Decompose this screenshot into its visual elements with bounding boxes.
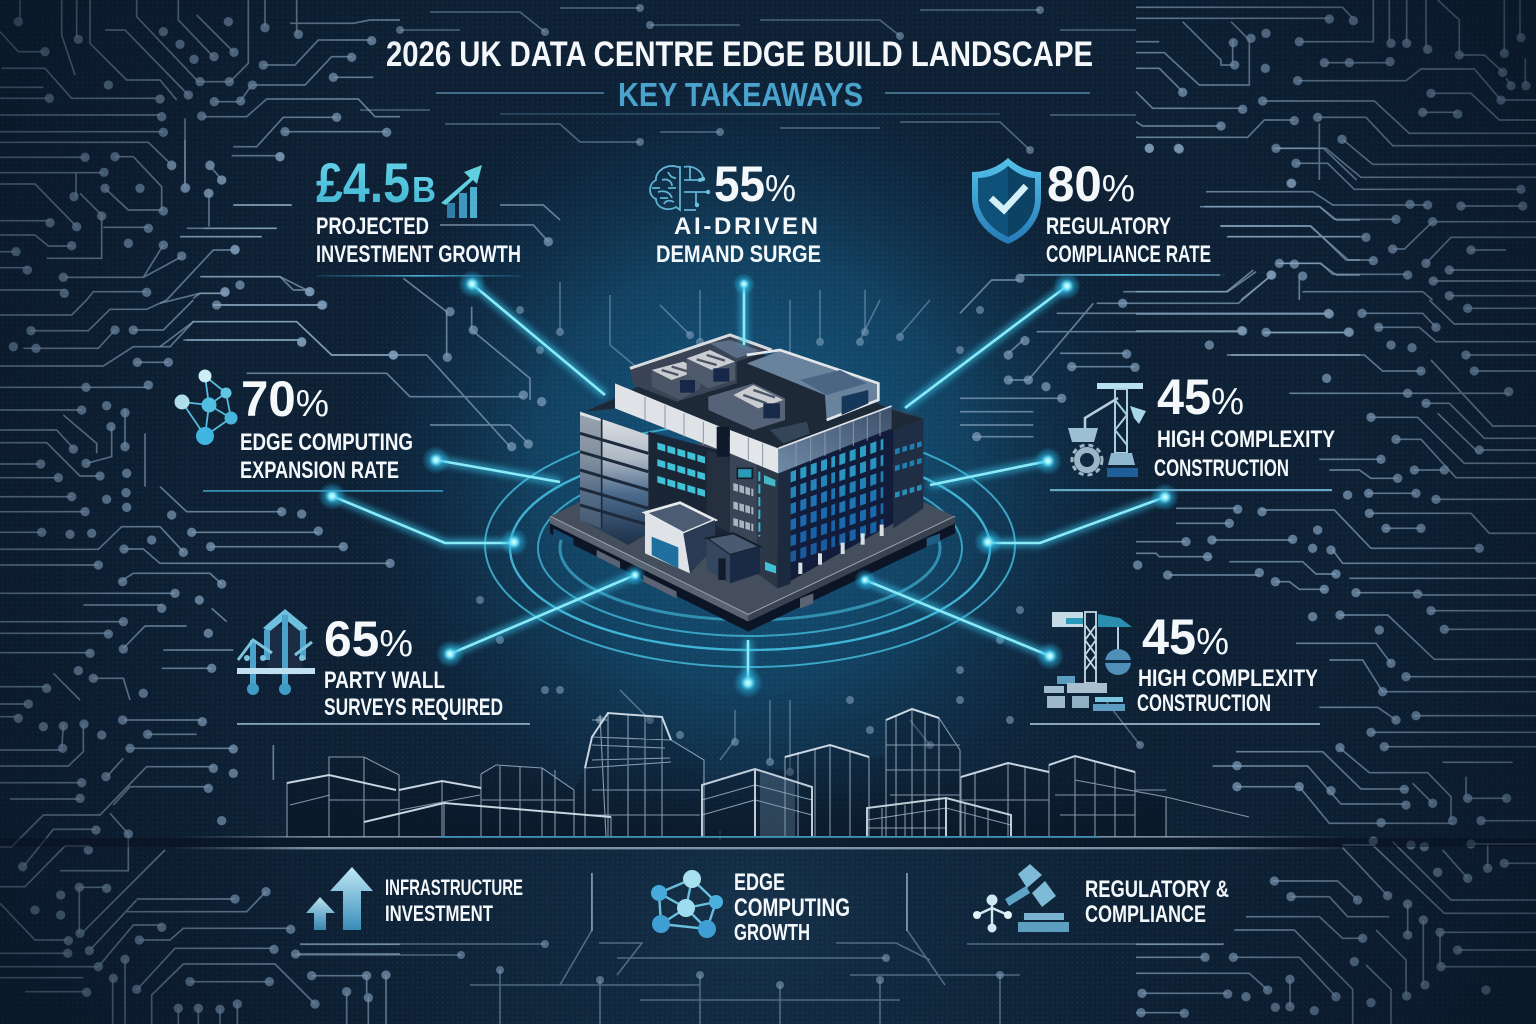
label: DEMAND SURGE bbox=[656, 241, 821, 268]
skyline illustration bbox=[287, 709, 1249, 837]
label bbox=[1154, 426, 1335, 482]
metric: edge computing expansion bbox=[174, 370, 413, 484]
label: CONSTRUCTION bbox=[1137, 690, 1271, 717]
label: COMPUTING bbox=[734, 894, 850, 922]
metric: high complexity construction lower bbox=[1044, 609, 1318, 717]
footer: edge computing growth bbox=[651, 869, 850, 945]
label bbox=[240, 429, 413, 484]
label: INFRASTRUCTURE bbox=[385, 875, 523, 900]
label bbox=[324, 667, 503, 721]
building platform bbox=[550, 420, 955, 632]
divider: construction lower bbox=[1030, 723, 1320, 725]
label: AI-DRIVEN bbox=[674, 213, 818, 240]
connector lines bbox=[318, 270, 1179, 698]
ground lines bbox=[0, 836, 1536, 849]
divider: edge bbox=[203, 490, 443, 492]
icon: crane with gear bbox=[1068, 383, 1146, 477]
label bbox=[1085, 876, 1229, 928]
rooftop duct block bbox=[747, 350, 878, 420]
label: COMPLIANCE RATE bbox=[1046, 241, 1211, 268]
metric: investment growth bbox=[316, 151, 521, 268]
icon: rising bar chart bbox=[441, 165, 482, 218]
label bbox=[656, 213, 821, 268]
building right face windows bbox=[777, 410, 893, 588]
label: CONSTRUCTION bbox=[1154, 455, 1289, 482]
divider: construction upper bbox=[1050, 489, 1332, 491]
rooftop plant enclosure bbox=[630, 335, 772, 402]
white entrance block bbox=[645, 503, 715, 573]
icon: shield with check bbox=[972, 158, 1041, 244]
value: £4.5B: B bbox=[412, 169, 436, 210]
value: £4.5B: £4.5 bbox=[316, 151, 410, 214]
label: GROWTH bbox=[734, 919, 810, 945]
icon: party wall structure bbox=[237, 609, 315, 695]
icon: network bbox=[651, 870, 723, 938]
label: EDGE bbox=[734, 869, 785, 896]
title: 2026 UK DATA CENTRE EDGE BUILD LANDSCAPE bbox=[386, 35, 1093, 74]
metric: AI-driven demand bbox=[650, 156, 821, 268]
icon: circuit brain bbox=[650, 166, 710, 210]
metric: party wall surveys bbox=[237, 609, 503, 721]
subtitle with flanking lines: KEY TAKEAWAYS bbox=[618, 76, 863, 113]
divider: compliance bbox=[1020, 274, 1225, 276]
roof bbox=[585, 340, 923, 473]
value: 55%: 55% bbox=[714, 156, 796, 212]
value: 65%: 65% bbox=[324, 611, 413, 667]
rooftop cooling unit bbox=[708, 383, 810, 443]
value: 45%: 45% bbox=[1157, 369, 1244, 425]
metric: regulatory compliance bbox=[972, 156, 1211, 268]
footer: regulatory and compliance bbox=[973, 864, 1229, 932]
label: PROJECTED bbox=[316, 213, 429, 240]
central data centre building bbox=[550, 335, 955, 632]
label: HIGH COMPLEXITY bbox=[1138, 665, 1318, 692]
icon: gavel and scales bbox=[973, 864, 1069, 932]
label bbox=[1046, 213, 1211, 268]
building right wing bbox=[893, 408, 923, 528]
label bbox=[385, 875, 523, 926]
label bbox=[316, 213, 521, 268]
glow rings around the building bbox=[485, 423, 1015, 667]
label: COMPLIANCE bbox=[1085, 901, 1206, 928]
label: EDGE COMPUTING bbox=[240, 429, 413, 456]
metric: high complexity construction upper bbox=[1068, 369, 1335, 482]
footer divider left bbox=[591, 873, 593, 931]
label bbox=[734, 869, 850, 945]
value: 80%: 80% bbox=[1047, 156, 1135, 212]
building centre face windows bbox=[648, 432, 730, 553]
label: HIGH COMPLEXITY bbox=[1157, 426, 1335, 453]
label: INVESTMENT GROWTH bbox=[316, 241, 521, 268]
building left wing bbox=[580, 412, 648, 545]
label: PARTY WALL bbox=[324, 667, 445, 694]
label: REGULATORY bbox=[1046, 213, 1171, 240]
icon: up arrows bbox=[306, 867, 373, 930]
building mid face bbox=[730, 452, 778, 588]
footer divider right bbox=[906, 873, 908, 931]
divider: party wall bbox=[237, 723, 530, 725]
label: EXPANSION RATE bbox=[240, 457, 399, 484]
icon: crane and bricks bbox=[1044, 612, 1132, 711]
value: 70%: 70% bbox=[241, 371, 329, 427]
small annex block bbox=[707, 533, 760, 583]
label: INVESTMENT bbox=[385, 901, 493, 926]
footer: infrastructure investment bbox=[306, 867, 523, 930]
value: 45%: 45% bbox=[1142, 609, 1229, 665]
icon: network nodes bbox=[174, 370, 238, 445]
label bbox=[1137, 665, 1318, 717]
divider: investment bbox=[316, 275, 521, 277]
label: REGULATORY & bbox=[1085, 876, 1229, 903]
label: SURVEYS REQUIRED bbox=[324, 694, 503, 721]
